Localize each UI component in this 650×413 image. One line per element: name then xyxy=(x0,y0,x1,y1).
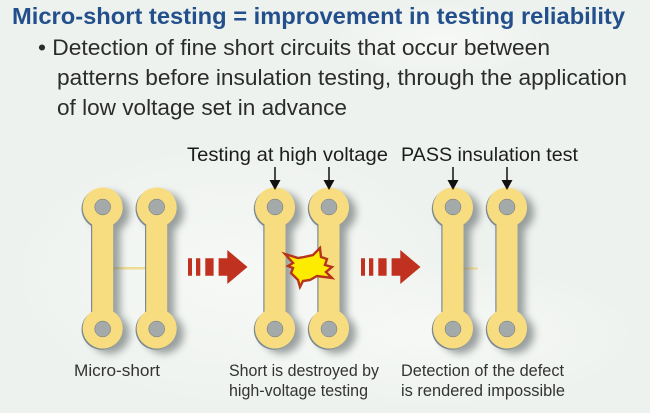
caption: micro-short: Micro-short xyxy=(74,362,160,380)
caption: detection impossible: Detection of the defect xyxy=(401,362,564,380)
icon: explosion star xyxy=(285,248,332,287)
caption: short is destroyed xyxy=(229,362,380,400)
caption: short is destroyed: Short is destroyed by xyxy=(229,362,380,380)
stage 3: pass traces xyxy=(432,187,534,354)
test probe arrows xyxy=(270,167,512,190)
arrow: stage 2 to 3 xyxy=(361,250,421,284)
bullet description: • Detection of fine short circuits that occur between xyxy=(38,35,550,60)
bullet description xyxy=(38,35,627,120)
caption: short is destroyed: high-voltage testing xyxy=(229,382,368,400)
caption: detection impossible: is rendered impossible xyxy=(401,382,565,400)
stage 1: micro-short traces xyxy=(82,187,184,354)
caption: detection impossible xyxy=(401,362,565,400)
label: pass insulation test: PASS insulation test xyxy=(401,144,579,166)
bullet description: of low voltage set in advance xyxy=(57,95,347,120)
title: Micro-short testing = improvement in testing reliability xyxy=(12,3,625,29)
label: testing at high voltage: Testing at high voltage xyxy=(187,144,388,166)
stage 2: destroyed short traces xyxy=(254,187,356,354)
bullet description: patterns before insulation testing, through the application xyxy=(57,65,627,90)
arrow: stage 1 to 2 xyxy=(188,250,248,284)
